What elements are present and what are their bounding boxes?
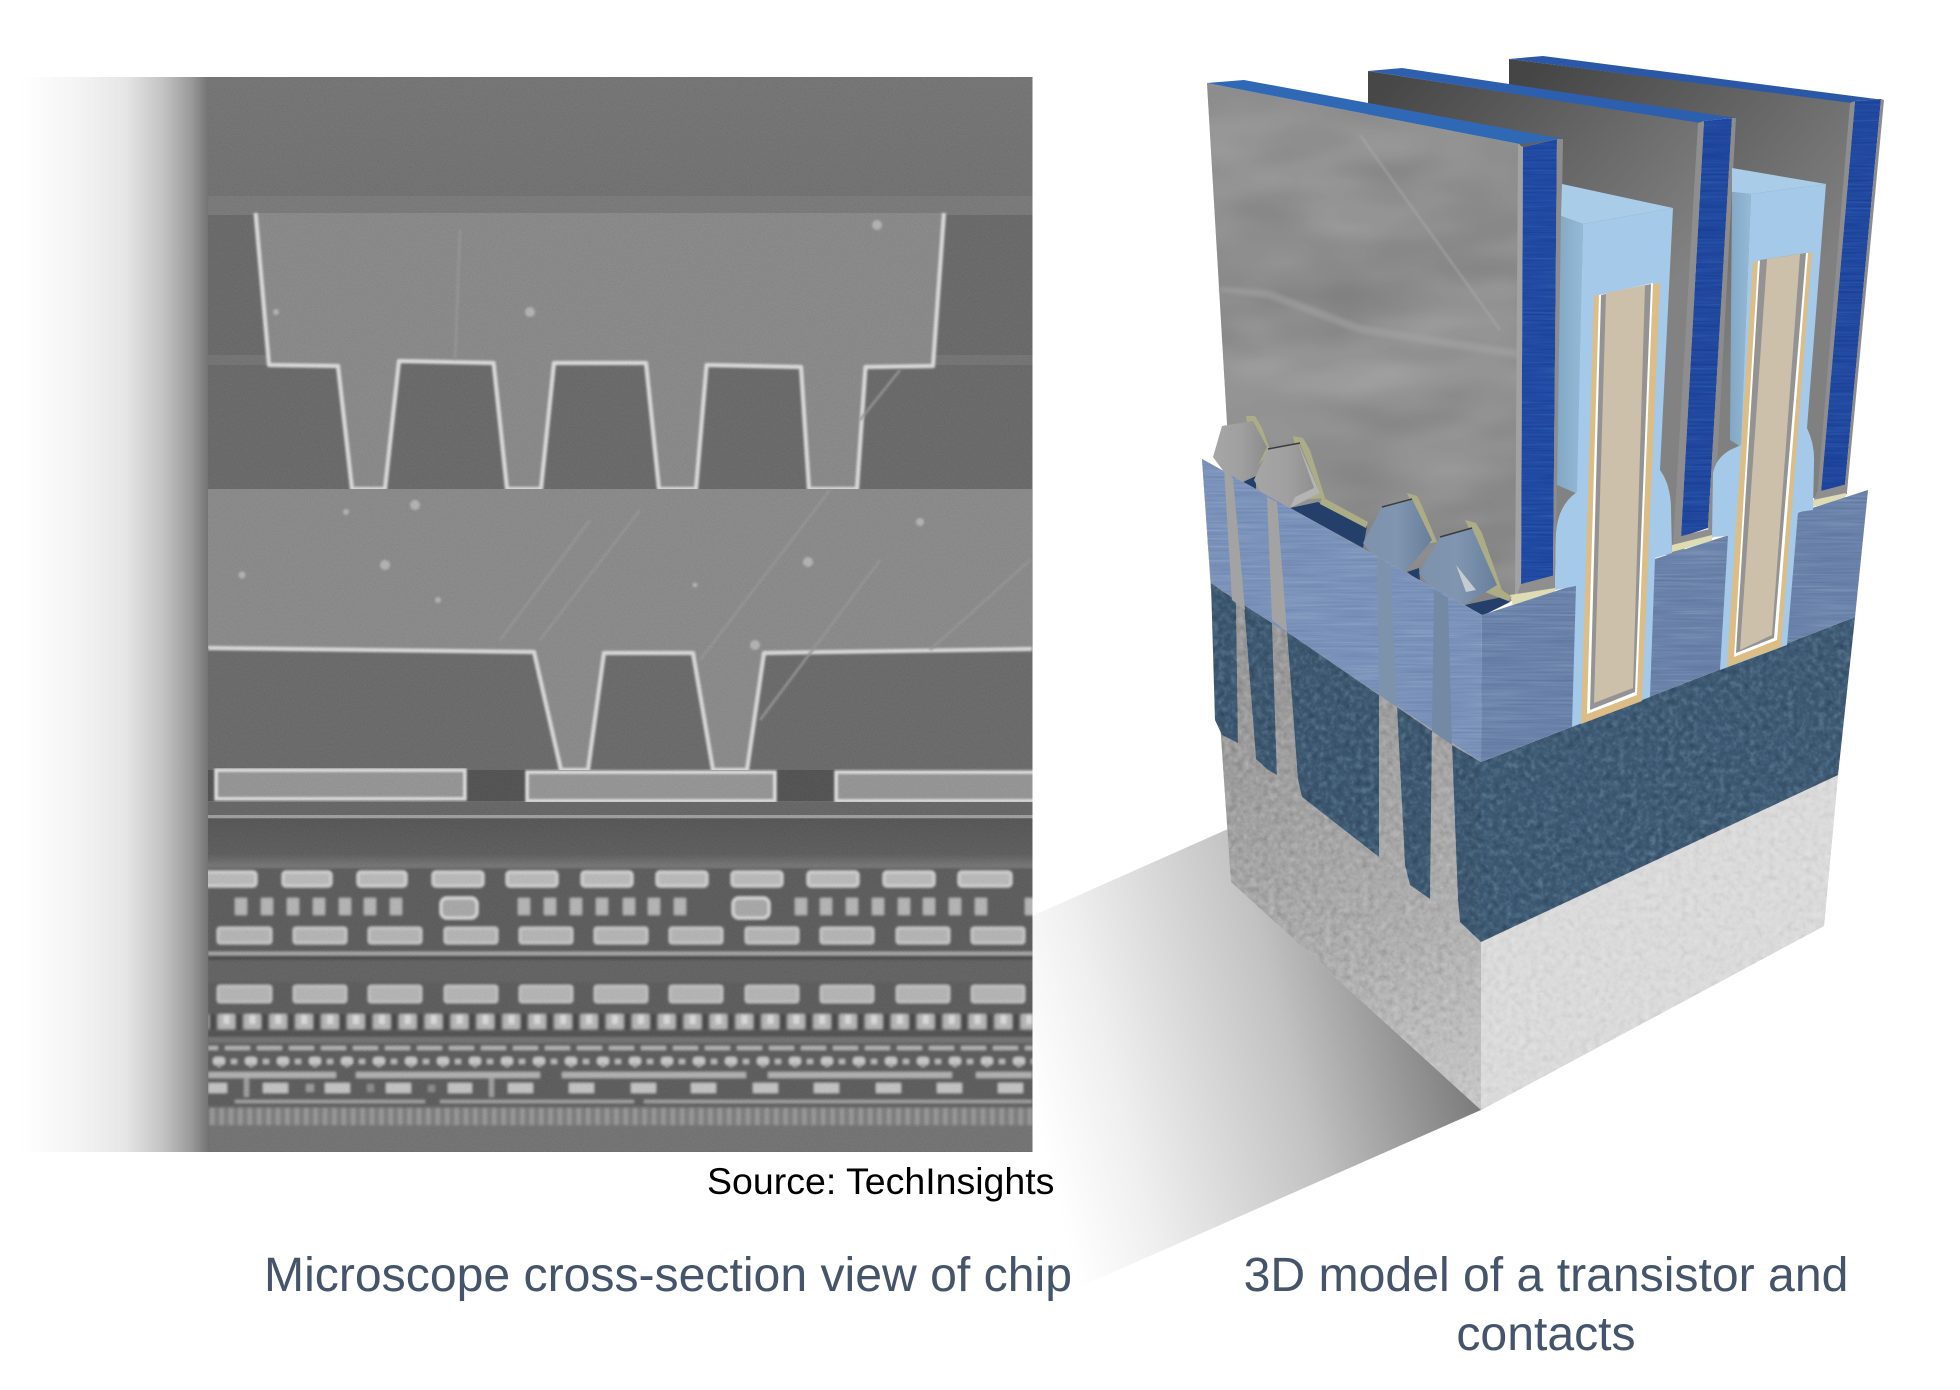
middle metal layer — [208, 220, 1032, 770]
3D transistor model — [1202, 56, 1884, 1110]
row F dashes — [208, 1046, 1033, 1050]
row D wires — [218, 986, 1024, 1002]
caption: 3D model: contacts — [1456, 1307, 1636, 1361]
metal substrate left face — [1202, 459, 1482, 1110]
contact stripes on left face — [1224, 468, 1452, 745]
front gate plate — [1207, 80, 1563, 616]
back gate plate — [1509, 56, 1884, 507]
projection shadow linking micrograph to 3D model — [1032, 829, 1481, 1308]
caption: 3D model: 3D model of a transistor and — [1244, 1248, 1848, 1302]
front pillar with gate — [1555, 184, 1673, 727]
row E fine wires — [208, 1014, 1033, 1030]
metal pads row — [208, 770, 1036, 869]
fin contacts and exposed channel stacks — [1213, 416, 1512, 616]
row A wires — [200, 872, 1011, 886]
row B vias — [235, 898, 1037, 918]
row H long bars — [208, 1072, 1032, 1078]
middle gate plate — [1368, 68, 1736, 558]
row G dots — [208, 1057, 1033, 1067]
insulator layer left face — [1202, 459, 1482, 762]
rear pillar with gate — [1712, 168, 1826, 670]
row C wires — [218, 928, 1024, 943]
row I small pads — [208, 1078, 1023, 1097]
row K stripes — [208, 1106, 1033, 1109]
fade gradient left of micrograph — [0, 77, 208, 1152]
source credit: Source: TechInsights — [707, 1160, 1054, 1202]
dark dielectric fingers — [1211, 583, 1481, 942]
upper metal layer — [252, 212, 948, 489]
right faces: silicon base, dark layer, insulator — [1481, 490, 1868, 1110]
panel: microscope cross-section — [200, 77, 1037, 1152]
row J lines — [235, 1100, 1032, 1103]
caption: microscope view: Microscope cross-section view of chip — [264, 1248, 1072, 1302]
lower interconnect layers — [200, 868, 1037, 1152]
